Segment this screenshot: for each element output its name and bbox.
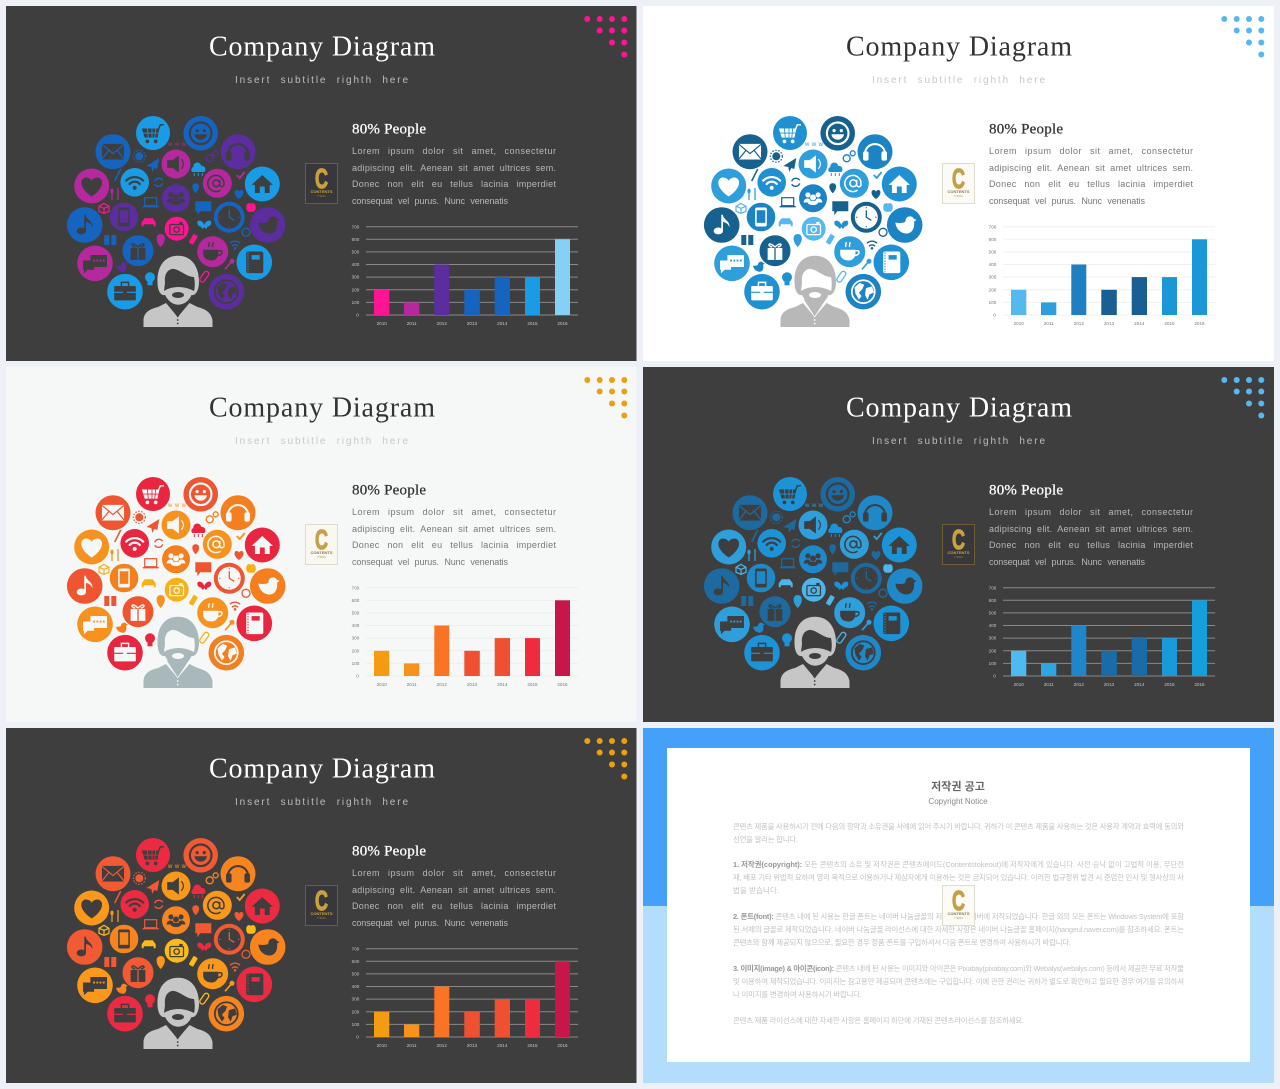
axis labels: 400 bbox=[352, 262, 360, 267]
subtitle: Insert subtitle righth here bbox=[872, 75, 1045, 86]
body text: Donec non elit eu tellus lacinia imperdiet bbox=[989, 540, 1193, 550]
axis labels: 2010 bbox=[1014, 321, 1024, 326]
axis labels: 0 bbox=[993, 313, 996, 318]
axis labels: 0 bbox=[993, 674, 996, 679]
panel: slide 5 dark orange bbox=[6, 728, 636, 1083]
axis labels bbox=[989, 585, 1205, 687]
axis labels: 2012 bbox=[1074, 682, 1084, 687]
axis labels: 2014 bbox=[497, 682, 508, 687]
axis labels: 0 bbox=[356, 313, 359, 318]
logo badge: CONTENTS bbox=[948, 550, 970, 555]
decorative dot grid bbox=[584, 16, 627, 58]
axis labels: 2012 bbox=[437, 321, 447, 326]
body text: consequat vel purus. Nunc venenatis bbox=[989, 196, 1146, 206]
slide background bbox=[643, 367, 1274, 722]
body text: Lorem ipsum dolor sit amet, consectetur bbox=[989, 146, 1193, 156]
logo badge bbox=[942, 524, 974, 564]
notice body text: 재, 배포 기타 위법적 요하여 영리 목적으로 이용하거나 제삼자에게 이용하는 것은 금지되어 있습니다. 이러한 법규정위 발견 시 준엄한 민사 및 형사상의 사 bbox=[733, 873, 1184, 882]
axis labels: 200 bbox=[352, 648, 360, 653]
bars bbox=[374, 600, 570, 676]
axis labels: 2014 bbox=[497, 321, 508, 326]
logo badge: THEME bbox=[954, 195, 963, 198]
person figure bbox=[144, 617, 212, 688]
logo badge: C bbox=[315, 885, 328, 916]
notice body text: 나 이미지를 변경하여 사용하시기 바랍니다. bbox=[733, 990, 862, 999]
axis labels: 400 bbox=[989, 623, 997, 628]
axis labels: 600 bbox=[352, 237, 360, 242]
logo badge: THEME bbox=[317, 195, 326, 198]
axis labels: 500 bbox=[989, 610, 997, 616]
axis labels: 2014 bbox=[1134, 682, 1145, 687]
logo watermark: THEME bbox=[954, 917, 963, 920]
axis labels: 200 bbox=[352, 287, 360, 292]
body text: Lorem ipsum dolor sit amet, consectetur bbox=[352, 507, 556, 517]
axis labels: 2013 bbox=[467, 682, 478, 687]
axis labels: 400 bbox=[352, 623, 360, 628]
axis labels: 2012 bbox=[437, 682, 447, 687]
logo badge: C bbox=[315, 163, 328, 194]
icon cluster bbox=[67, 838, 286, 1032]
axis labels: 200 bbox=[352, 1009, 360, 1014]
axis labels: 400 bbox=[989, 262, 997, 267]
axis labels: 700 bbox=[989, 585, 997, 590]
decorative dot grid bbox=[584, 738, 627, 780]
bars bbox=[1011, 239, 1207, 315]
bar chart bbox=[352, 946, 578, 1048]
icon cluster bbox=[67, 116, 286, 310]
notice body text: 1. 저작권(copyright): 모든 콘텐츠의 소유 및 저작권은 콘텐츠에이드(Contentstokeout)에 저작자에게 있습니다. 사전 승낙 없이 고법적 이용, 무단전 bbox=[733, 860, 1184, 869]
axis labels: 2011 bbox=[1044, 682, 1054, 687]
axis labels: 100 bbox=[352, 661, 360, 666]
logo badge: THEME bbox=[317, 917, 326, 920]
body text: Donec non elit eu tellus lacinia imperdiet bbox=[352, 540, 556, 550]
axis labels: 200 bbox=[989, 287, 997, 292]
axis labels: 200 bbox=[989, 648, 997, 653]
logo badge: CONTENTS bbox=[310, 189, 333, 194]
axis labels: 2014 bbox=[497, 1043, 508, 1048]
axis labels: 100 bbox=[989, 300, 997, 305]
axis labels: 0 bbox=[356, 1035, 359, 1040]
www label: www bbox=[804, 503, 824, 509]
body text: consequat vel purus. Nunc venenatis bbox=[352, 918, 508, 928]
heading: 80% People bbox=[352, 482, 426, 498]
slide background bbox=[6, 6, 636, 361]
axis labels: 2011 bbox=[407, 1043, 417, 1048]
axis labels: 500 bbox=[989, 250, 997, 254]
notice body text: 콘텐츠와 함께 제공되지 않으므로, 필요한 경우 정품 폰트를 구입하셔서 다음 폰트로 변경하여 사용하시기 바랍니다. bbox=[733, 938, 1071, 947]
panel: copyright notice bbox=[643, 728, 1274, 1083]
axis labels: 2015 bbox=[527, 1043, 538, 1048]
decorative dot grid bbox=[1221, 16, 1264, 58]
axis labels: 2013 bbox=[467, 321, 478, 326]
logo badge bbox=[306, 163, 338, 204]
icon cluster bbox=[67, 477, 286, 670]
body text: Lorem ipsum dolor sit amet, consectetur bbox=[352, 868, 556, 878]
bars bbox=[374, 961, 570, 1037]
panel: slide 3 light orange bbox=[6, 367, 636, 722]
body text: Lorem ipsum dolor sit amet, consectetur bbox=[989, 507, 1193, 517]
bar chart bbox=[989, 224, 1215, 326]
subtitle: Insert subtitle righth here bbox=[235, 797, 408, 808]
axis labels: 700 bbox=[352, 946, 360, 951]
axis labels: 2012 bbox=[1074, 321, 1084, 326]
logo watermark: C bbox=[952, 885, 965, 916]
axis labels: 700 bbox=[352, 585, 360, 590]
person figure bbox=[780, 617, 850, 688]
axis labels: 2011 bbox=[407, 321, 417, 326]
axis labels: 2015 bbox=[527, 321, 538, 326]
axis labels: 0 bbox=[356, 674, 359, 679]
logo badge: C bbox=[952, 524, 965, 555]
icon cluster bbox=[704, 116, 922, 310]
axis labels: 300 bbox=[352, 997, 360, 1002]
notice body text bbox=[733, 822, 1184, 1025]
www label: www bbox=[167, 142, 187, 148]
bar chart bbox=[352, 585, 578, 687]
axis labels: 500 bbox=[352, 250, 360, 254]
axis labels: 300 bbox=[989, 636, 997, 641]
body text bbox=[989, 507, 1193, 567]
icon cluster bbox=[704, 477, 922, 670]
notice body text: 콘텐츠 제품을 사용하시기 전에 다음의 항약과 소유권을 사례에 읽어 주시기 바랍니다. 귀하가 이 콘텐츠 제품을 사용하는 것은 사용자 계약과 효력에 동의와 bbox=[733, 822, 1184, 831]
axis labels bbox=[352, 224, 568, 326]
www label: www bbox=[167, 503, 187, 509]
heading: 80% People bbox=[989, 122, 1063, 138]
notice body text: 2. 폰트(font): 콘텐츠 내에 된 사용는 한글 폰트는 네이버 나눔글꼴의 저작권은 네이버에 저작되었습니다. 한글 외의 모든 폰트는 Windows System에 포함 bbox=[733, 912, 1184, 921]
decorative dot grid bbox=[1221, 377, 1264, 418]
axis labels: 2012 bbox=[437, 1043, 447, 1048]
axis labels: 600 bbox=[989, 598, 997, 603]
bars bbox=[374, 239, 570, 315]
axis labels: 500 bbox=[352, 972, 360, 976]
logo badge: C bbox=[315, 524, 328, 555]
slide background bbox=[643, 6, 1274, 361]
axis labels: 2011 bbox=[1044, 321, 1054, 326]
axis labels: 300 bbox=[352, 636, 360, 641]
logo badge: CONTENTS bbox=[310, 550, 333, 555]
logo badge: THEME bbox=[954, 556, 963, 559]
slide background bbox=[6, 367, 636, 722]
axis labels: 700 bbox=[352, 224, 360, 229]
axis labels: 500 bbox=[352, 610, 360, 616]
axis labels: 2010 bbox=[377, 682, 387, 687]
logo badge bbox=[306, 524, 338, 564]
axis labels: 2010 bbox=[377, 1043, 387, 1048]
body text: Lorem ipsum dolor sit amet, consectetur bbox=[352, 146, 556, 156]
axis labels: 600 bbox=[989, 237, 997, 242]
axis labels: 2013 bbox=[467, 1043, 478, 1048]
body text bbox=[352, 507, 556, 567]
axis labels: 2015 bbox=[1164, 682, 1175, 687]
title: Company Diagram bbox=[209, 392, 435, 424]
axis labels: 2014 bbox=[1134, 321, 1145, 326]
panel: slide 4 dark blue bbox=[643, 367, 1274, 722]
notice body text: 법을 받습니다. bbox=[733, 886, 779, 895]
axis labels: 300 bbox=[352, 275, 360, 280]
logo watermark bbox=[942, 885, 974, 926]
axis labels: 2013 bbox=[1104, 321, 1115, 326]
heading: 80% People bbox=[352, 122, 426, 138]
axis labels: 2010 bbox=[1014, 682, 1024, 687]
axis labels: 600 bbox=[352, 959, 360, 964]
subtitle: Insert subtitle righth here bbox=[235, 436, 408, 447]
axis labels: 2016 bbox=[557, 1043, 568, 1048]
axis labels: 2010 bbox=[377, 321, 387, 326]
axis labels: 2016 bbox=[1194, 682, 1205, 687]
logo watermark: CONTENTS bbox=[948, 911, 970, 916]
subtitle: Insert subtitle righth here bbox=[235, 75, 408, 86]
logo badge bbox=[306, 885, 338, 926]
body text: consequat vel purus. Nunc venenatis bbox=[352, 196, 508, 206]
body text: adipiscing elit. Aenean sit amet ultrices sem. bbox=[989, 163, 1193, 173]
title: Company Diagram bbox=[846, 392, 1072, 424]
axis labels: 100 bbox=[352, 1022, 360, 1027]
notice body text: 콘텐츠 제품 라이선스에 대한 자세한 사항은 홈페이지 하단에 기재된 콘텐츠라이선스를 참조하세요. bbox=[733, 1016, 1024, 1025]
logo badge: C bbox=[952, 163, 965, 194]
www label: www bbox=[804, 142, 824, 148]
heading: 80% People bbox=[989, 482, 1063, 498]
person figure bbox=[144, 256, 212, 327]
axis labels: 2011 bbox=[407, 682, 417, 687]
panel: slide 2 white blue bbox=[643, 6, 1274, 361]
axis labels: 100 bbox=[989, 661, 997, 666]
body text: adipiscing elit. Aenean sit amet ultrices sem. bbox=[352, 163, 556, 173]
bar chart bbox=[352, 224, 578, 326]
axis labels: 2016 bbox=[557, 321, 568, 326]
heading: 80% People bbox=[352, 844, 426, 860]
decorative dot grid bbox=[584, 377, 627, 418]
axis labels: 700 bbox=[989, 224, 997, 229]
body text: consequat vel purus. Nunc venenatis bbox=[352, 557, 508, 567]
logo badge bbox=[942, 163, 974, 204]
logo badge: CONTENTS bbox=[948, 189, 970, 194]
axis labels: 2016 bbox=[1194, 321, 1205, 326]
axis labels: 2016 bbox=[557, 682, 568, 687]
body text: adipiscing elit. Aenean sit amet ultrices sem. bbox=[352, 885, 556, 895]
notice heading: 저작권 공고 bbox=[931, 779, 985, 793]
axis labels bbox=[352, 585, 568, 687]
axis labels: 2015 bbox=[527, 682, 538, 687]
body text: adipiscing elit. Aenean sit amet ultrices sem. bbox=[989, 524, 1193, 534]
slide background bbox=[6, 728, 636, 1083]
person figure bbox=[144, 978, 212, 1049]
panel: slide 1 dark magenta-blue bbox=[6, 6, 636, 361]
bars bbox=[1011, 600, 1207, 676]
body text: Donec non elit eu tellus lacinia imperdiet bbox=[352, 179, 556, 189]
axis labels bbox=[989, 224, 1205, 326]
www label: www bbox=[167, 864, 187, 870]
pale blue lower background bbox=[643, 906, 1274, 1083]
notice body text: 3. 이미지(image) & 아이콘(icon): 콘텐츠 내에 된 사용는 이미지와 아이콘은 Pixabay(pixabay.com)와 Webalys(webalys.com) 등에서 제공한 무료 저작물 bbox=[733, 964, 1184, 973]
notice body text: 선언을 알리는 합니다. bbox=[733, 835, 798, 844]
logo badge: CONTENTS bbox=[310, 911, 333, 916]
notice body text: 된 서체의 글꼴로 제작되었습니다. 네이버 나눔글꼴 라이선스에 대한 자세한 사항은 네이버 나눔글꼴 홈페이지(hangeul.naver.com)를 참조하세요. 폰트는 bbox=[733, 925, 1184, 934]
title: Company Diagram bbox=[846, 32, 1072, 62]
axis labels: 2015 bbox=[1164, 321, 1175, 326]
axis labels: 300 bbox=[989, 275, 997, 280]
bar chart bbox=[989, 585, 1215, 687]
body text: Donec non elit eu tellus lacinia imperdiet bbox=[352, 901, 556, 911]
axis labels: 2013 bbox=[1104, 682, 1115, 687]
body text: consequat vel purus. Nunc venenatis bbox=[989, 557, 1146, 567]
axis labels: 600 bbox=[352, 598, 360, 603]
body text: Donec non elit eu tellus lacinia imperdiet bbox=[989, 179, 1193, 189]
white notice card bbox=[667, 748, 1250, 1062]
logo badge: THEME bbox=[317, 556, 326, 559]
notice subheading: Copyright Notice bbox=[928, 797, 988, 806]
blue upper background bbox=[643, 728, 1274, 906]
subtitle: Insert subtitle righth here bbox=[872, 436, 1045, 447]
notice body text: 및 이용하여 제작되었습니다. 이미지는 참고용만 제공되며 콘텐츠에는 구입합니다. 이에 관한 권리는 귀하가 별도로 확인하고 필요한 경우 여기를 유의하셔 bbox=[733, 977, 1184, 986]
body text bbox=[352, 146, 556, 206]
body text bbox=[352, 868, 556, 928]
axis labels: 400 bbox=[352, 984, 360, 989]
body text: adipiscing elit. Aenean sit amet ultrices sem. bbox=[352, 524, 556, 534]
person figure bbox=[780, 256, 850, 327]
body text bbox=[989, 146, 1193, 206]
title: Company Diagram bbox=[209, 32, 435, 62]
title: Company Diagram bbox=[209, 754, 435, 784]
axis labels: 100 bbox=[352, 300, 360, 305]
axis labels bbox=[352, 946, 568, 1048]
